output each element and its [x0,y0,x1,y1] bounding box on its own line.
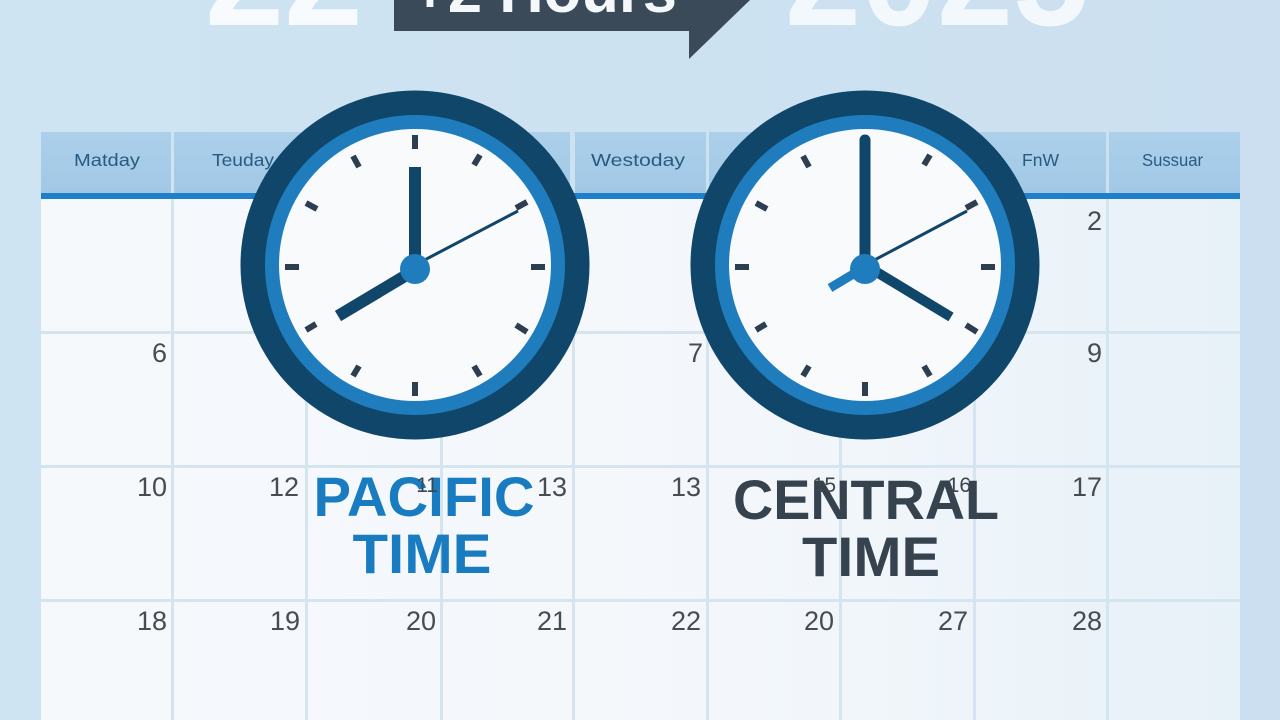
clock hands [830,140,967,317]
clock: Pacific Time [240,90,590,440]
date numbers [137,206,1102,636]
date numbers: 27 [938,606,968,636]
date numbers: 18 [137,606,167,636]
date numbers overlapping the labels [416,474,971,497]
label: Central Time: CENTRAL [733,468,999,531]
clock hands [338,167,518,316]
clock: Central Time [690,90,1040,440]
weekday labels: Westoday [591,150,685,170]
date numbers: 17 [1072,472,1102,502]
date numbers: 6 [152,338,167,368]
date numbers: 7 [688,338,703,368]
calendar grid lines [41,199,1240,720]
weekday labels: Teuday [212,150,274,170]
weekday labels: Sussuar [1142,150,1203,170]
date numbers: 28 [1072,606,1102,636]
date numbers: 21 [537,606,567,636]
label: Central Time [733,468,999,588]
date numbers: 13 [537,472,567,502]
weekday labels [74,150,1203,170]
calendar header cells [41,132,1240,193]
hour ticks [285,135,545,396]
date numbers overlapping the labels: 11 [416,474,438,497]
calendar header rule [41,193,1240,199]
hour ticks [735,135,995,396]
label: Central Time: TIME [802,525,940,588]
date numbers: 13 [671,472,701,502]
label: Pacific Time: TIME [352,522,492,585]
weekday labels: Matday [74,150,140,170]
date numbers: 9 [1087,338,1102,368]
calendar [41,132,1240,720]
calendar body [41,199,1240,720]
date numbers: 2 [1087,206,1102,236]
date numbers: 20 [804,606,834,636]
label: Pacific Time: PACIFIC [314,465,534,528]
date numbers: 12 [269,472,299,502]
date numbers: 22 [671,606,701,636]
date numbers: 20 [406,606,436,636]
date numbers overlapping the labels: 16 [948,474,971,497]
date numbers: 19 [270,606,300,636]
label: Pacific Time [314,465,534,585]
banner: time difference [394,0,750,59]
date numbers overlapping the labels: 15 [813,474,836,497]
weekday labels: FnW [1022,150,1059,170]
date numbers: 10 [137,472,167,502]
